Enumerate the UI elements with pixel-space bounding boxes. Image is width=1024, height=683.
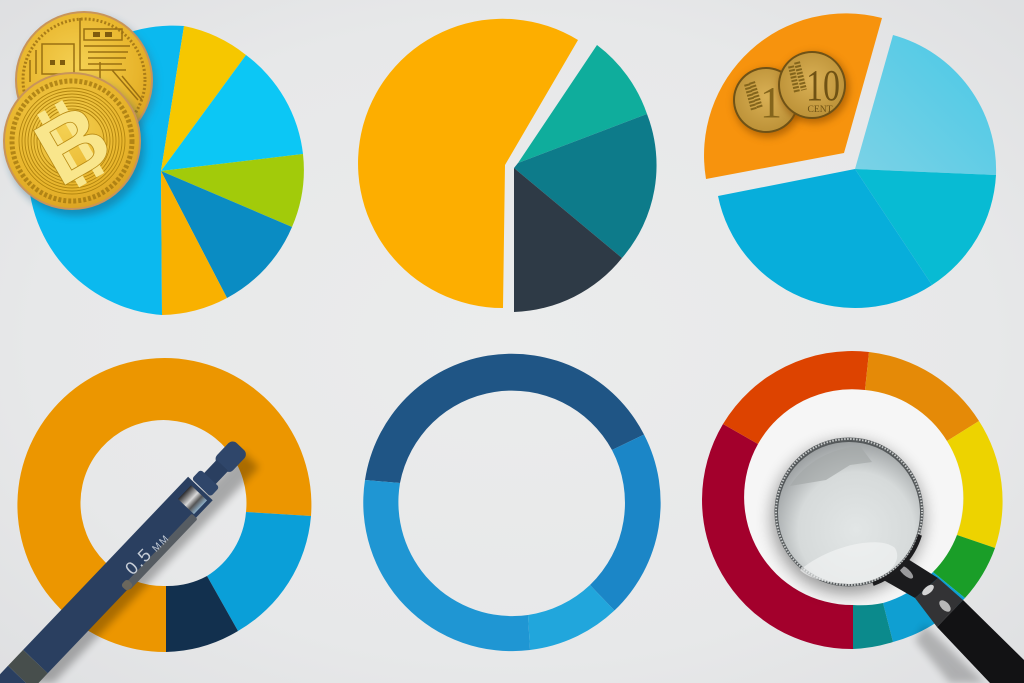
icon: bitcoin coins — [3, 11, 156, 216]
ten cent coin: CENT — [808, 105, 833, 115]
pencil grip — [8, 650, 48, 683]
ten cent coin: 10 — [806, 61, 840, 110]
icon: magnifying glass — [772, 438, 1024, 683]
back coin — [15, 11, 156, 153]
magnifier lens — [774, 438, 924, 586]
donut chart: bottom left, orange blue and navy — [17, 358, 311, 652]
pie chart: top right, orange slice with euro coins — [704, 13, 996, 308]
bitcoin symbol: B — [19, 84, 127, 206]
ten cent coin — [778, 51, 849, 123]
icon: mechanical pencil — [0, 438, 259, 683]
pencil body — [23, 477, 213, 673]
magnifier knurled band — [915, 578, 963, 627]
front coin — [3, 72, 145, 216]
pie chart: top left, blue with coloured slices — [28, 26, 304, 315]
pencil tip section — [0, 666, 26, 683]
donut chart: bottom centre, thin blue ring — [363, 354, 661, 651]
one cent coin: 1 — [760, 78, 782, 127]
donut chart: bottom right, rainbow ring — [702, 351, 1003, 649]
pencil lead size label: 0.5MM — [121, 527, 173, 579]
magnifier neck — [880, 556, 938, 598]
pencil chrome ring — [178, 485, 207, 514]
icon: euro cent coins — [733, 51, 849, 137]
pencil clip — [121, 512, 198, 592]
magnifier handle — [937, 600, 1024, 683]
pie chart: top centre, exploded orange slice — [358, 19, 657, 312]
pencil cap — [213, 439, 248, 474]
